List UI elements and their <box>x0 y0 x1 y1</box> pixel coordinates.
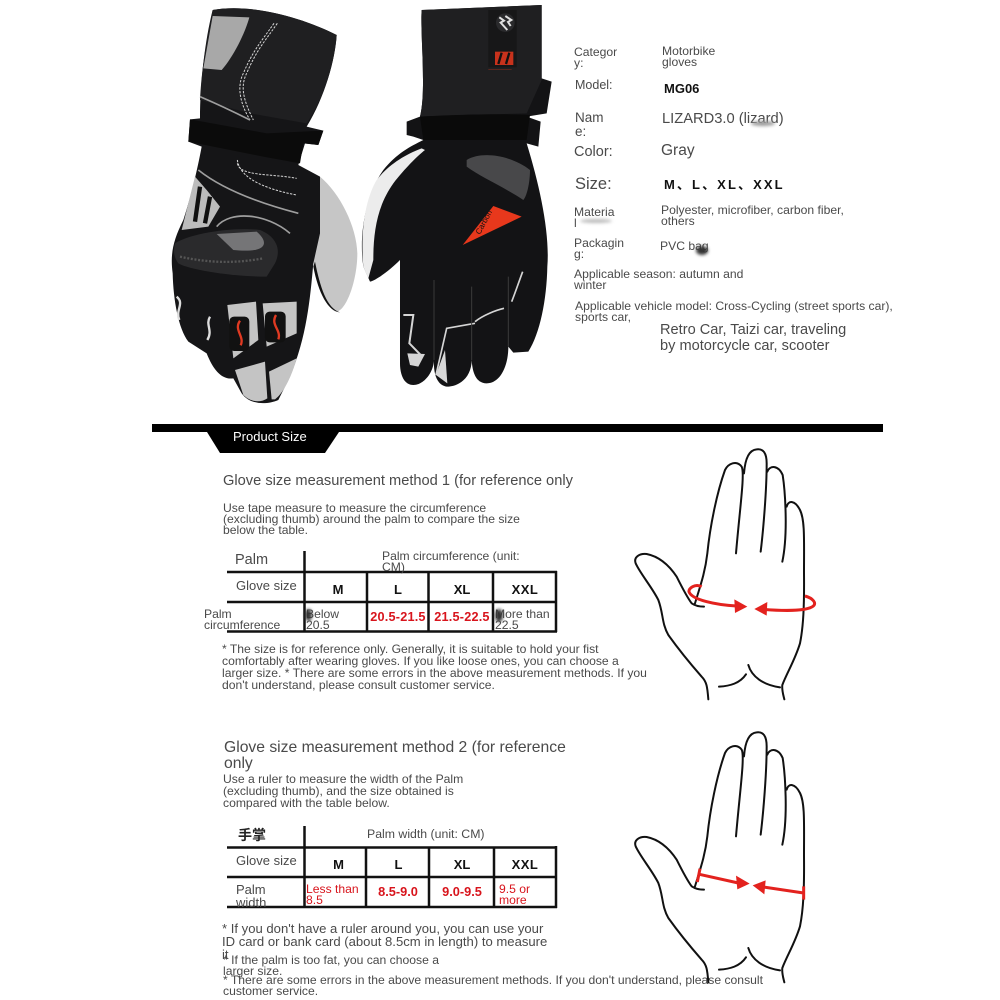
spec: category <box>574 45 617 70</box>
hand diagram: circumference <box>634 448 816 700</box>
spec: name <box>575 110 604 139</box>
spec: material value: others <box>661 214 695 228</box>
size table 1 <box>204 549 558 633</box>
spec: category value: Motorbike <box>662 44 715 58</box>
spec: name: e: <box>575 124 586 139</box>
spec: material <box>574 205 614 230</box>
method 2 note: palm too fat: larger size. <box>223 964 282 978</box>
size table 1: Below <box>306 607 339 621</box>
method 2 note: errors <box>223 973 763 998</box>
method 1 note: * The size is for reference only. Generally, it is suitable to hold your fist <box>222 642 599 656</box>
size table 1: L <box>394 582 402 597</box>
spec: name value: LIZARD3.0 (lizard) <box>662 111 784 127</box>
method 1 instructions <box>223 501 520 537</box>
method 2 note: ruler tip: * If you don't have a ruler around you, you can use your <box>222 921 543 936</box>
spec: applicable vehicle continued <box>660 322 846 354</box>
spec: applicable vehicle: sports car, <box>575 310 631 324</box>
spec: name: Nam <box>575 110 604 125</box>
method 1 note: don't understand, please consult customer service. <box>222 678 495 692</box>
size table 2: Palm <box>236 882 266 897</box>
size table 2: 8.5 <box>306 892 323 906</box>
size table 1: CM) <box>382 560 405 574</box>
size table 2: XXL <box>512 857 538 872</box>
spec: size: Size: <box>575 175 612 193</box>
section header: product size <box>152 424 883 453</box>
size table 1: Palm circumference (unit: <box>382 549 520 563</box>
hand diagram: width <box>634 731 806 984</box>
right glove: palm <box>362 5 552 387</box>
left glove: back of hand <box>172 8 357 403</box>
method 1 note: larger size. * There are some errors in the above measurement methods. If you <box>222 666 647 680</box>
method 1 instructions: (excluding thumb) around the palm to compare the size <box>223 512 520 526</box>
spec: applicable season: winter <box>574 278 606 292</box>
product photo: gloves <box>172 5 552 404</box>
method 2 heading: Glove size measurement method 2 (for reference <box>224 739 566 756</box>
spec: applicable vehicle: Applicable vehicle model: Cross-Cycling (street sports car), <box>575 299 893 313</box>
method 2 instructions: compared with the table below. <box>223 796 390 810</box>
method 2 note: errors: * There are some errors in the above measurement methods. If you don't understand, please consult <box>223 973 763 987</box>
spec: packaging <box>574 236 624 261</box>
spec: category: Categor <box>574 45 617 59</box>
size table 1: Glove size <box>236 578 297 593</box>
method 1 instructions: below the table. <box>223 523 308 537</box>
spec: applicable season <box>574 267 743 292</box>
spec: packaging: Packagin <box>574 236 624 250</box>
size table 1: 22.5 <box>495 618 519 632</box>
size table 1: XXL <box>512 582 538 597</box>
spec: model: Model: <box>575 78 613 92</box>
size table 1: XL <box>454 582 470 597</box>
size table 1: More than <box>495 607 550 621</box>
size table 1: Palm <box>235 552 268 568</box>
spec: material: Materia <box>574 205 614 219</box>
size table 2: width <box>236 895 266 910</box>
section header: product size: Product Size <box>233 429 307 444</box>
size table 1: Palm <box>204 607 232 621</box>
size table 2: L <box>395 857 402 872</box>
spec: material: l <box>574 216 577 230</box>
method 2 note: palm too fat: * If the palm is too fat, you can choose a <box>223 953 439 967</box>
size table 2: XL <box>454 857 470 872</box>
size table 2: M <box>333 857 344 872</box>
spec: packaging: g: <box>574 247 584 261</box>
spec: applicable vehicle continued: Retro Car, Taizi car, traveling <box>660 322 846 338</box>
spec: applicable vehicle <box>575 299 893 324</box>
size table 2: 手掌 <box>238 827 266 843</box>
spec: material value: Polyester, microfiber, carbon fiber, <box>661 203 844 217</box>
method 2 instructions <box>223 772 463 810</box>
method 2 heading: only <box>224 755 253 772</box>
spec: applicable season: Applicable season: autumn and <box>574 267 743 281</box>
size table 1: 20.5-21.5 <box>370 610 426 624</box>
size table 2: 8.5-9.0 <box>378 884 418 899</box>
size table 1: 21.5-22.5 <box>434 610 490 624</box>
size table 2: more <box>499 892 527 906</box>
spec: category: y: <box>574 56 583 70</box>
size table 1: circumference <box>204 618 280 632</box>
spec: model value: MG06 <box>664 81 699 96</box>
size table 2: Glove size <box>236 853 297 868</box>
size table 2: 9.0-9.5 <box>442 884 482 899</box>
method 2 heading <box>224 739 566 772</box>
spec: color value: Gray <box>661 142 695 159</box>
size table 2 <box>227 826 558 910</box>
method 2 instructions: Use a ruler to measure the width of the Palm <box>223 772 463 786</box>
size table 2: Less than <box>306 882 359 896</box>
size table 2: Palm width (unit: CM) <box>367 827 485 841</box>
size table 2: 9.5 or <box>499 882 530 896</box>
method 1 note <box>222 642 647 692</box>
method 2 note: ruler tip: ID card or bank card (about 8.5cm in length) to measure <box>222 934 547 949</box>
method 2 note: ruler tip <box>222 921 547 962</box>
spec: packaging value: PVC bag <box>660 239 709 253</box>
method 2 note: errors: customer service. <box>223 984 318 998</box>
spec: applicable vehicle continued: by motorcycle car, scooter <box>660 338 830 354</box>
spec: color: Color: <box>574 144 613 160</box>
size table 1: 20.5 <box>306 618 330 632</box>
method 2 note: palm too fat <box>223 953 439 978</box>
method 2 instructions: (excluding thumb), and the size obtained is <box>223 784 454 798</box>
spec: category value <box>662 44 715 69</box>
label on red patch: Carbon <box>474 209 494 236</box>
method 1 heading: Glove size measurement method 1 (for reference only <box>223 473 573 489</box>
spec: category value: gloves <box>662 55 697 69</box>
size table 1: M <box>333 582 343 597</box>
spec: material value <box>661 203 844 228</box>
method 2 note: ruler tip: it <box>222 947 229 962</box>
spec: size value: M、L、XL、XXL <box>664 177 785 192</box>
method 1 note: comfortably after wearing gloves. If you like loose ones, you can choose a <box>222 654 619 668</box>
method 1 instructions: Use tape measure to measure the circumference <box>223 501 486 515</box>
